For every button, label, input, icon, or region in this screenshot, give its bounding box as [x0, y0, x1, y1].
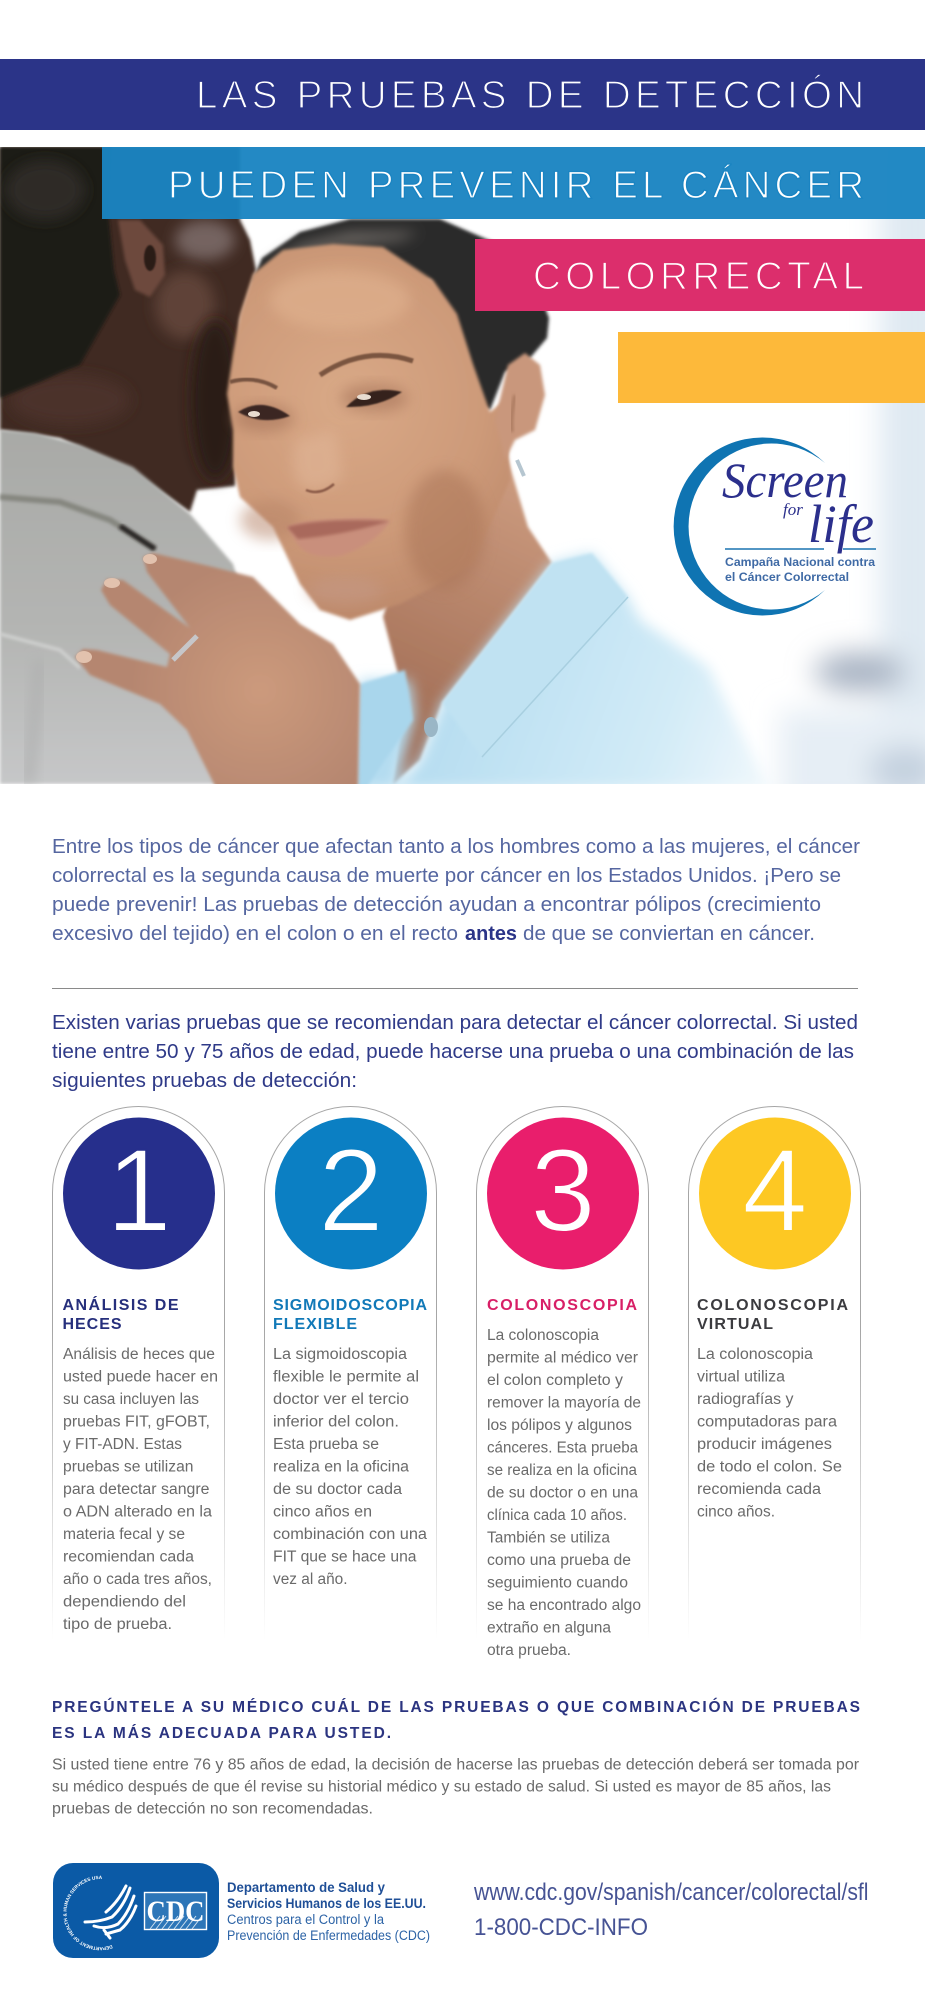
body text [273, 1346, 427, 1588]
body text: para detectar sangre [63, 1481, 210, 1498]
body text: remover la mayoría de [487, 1394, 641, 1412]
body text: cinco años en [273, 1504, 372, 1520]
body text: Análisis de heces que [63, 1346, 215, 1363]
body text: se realiza en la oficina [487, 1462, 637, 1479]
title band 1 [0, 59, 925, 130]
logo: HHS and CDC [53, 1863, 219, 1958]
title band 4: yellow [618, 332, 925, 403]
body text: y FIT-ADN. Estas [63, 1436, 182, 1453]
woman's hair [252, 219, 549, 410]
body text: dependiendo del [63, 1594, 186, 1610]
fingernails [76, 554, 157, 663]
body text: computadoras para [697, 1414, 837, 1430]
woman's face [227, 244, 510, 620]
age note paragraph [52, 1756, 859, 1818]
body text: se ha encontrado algo [487, 1597, 641, 1614]
panel: test 3 [476, 1106, 648, 1659]
man's hair [0, 147, 120, 398]
arch [476, 1106, 648, 1640]
body text: vez al año. [273, 1571, 348, 1588]
heading [62, 1295, 179, 1333]
body text: virtual utiliza [697, 1368, 785, 1386]
age note paragraph: Si usted tiene entre 76 y 85 años de edad, la decisión de hacerse las pruebas de detección deberá ser tomada por [52, 1756, 859, 1774]
agency names: Centros para el Control y la [227, 1912, 384, 1927]
body text: realiza en la oficina [273, 1458, 409, 1476]
call to action heading: ES LA MÁS ADECUADA PARA USTED. [52, 1725, 391, 1742]
heading: COLONOSCOPIA [697, 1297, 848, 1314]
agency names [227, 1880, 430, 1943]
intro paragraph 2: siguientes pruebas de detección: [52, 1069, 357, 1092]
man's ear [118, 220, 165, 297]
number circle 1 [63, 1118, 215, 1270]
woman's collar [441, 552, 628, 706]
nose [294, 436, 340, 489]
shirt collar seam [0, 497, 155, 549]
blurred window background [775, 219, 925, 784]
HHS seal text: DEPARTMENT OF HEALTH & HUMAN SERVICES USA [63, 1876, 113, 1950]
arch [688, 1106, 860, 1640]
body text: el colon completo y [487, 1372, 623, 1389]
body text: La colonoscopia [487, 1327, 599, 1344]
body text: de todo el colon. Se [697, 1458, 842, 1476]
intro paragraph: excesivo del tejido) en el colon o en el recto [52, 922, 458, 945]
body text: inferior del colon. [273, 1414, 399, 1430]
heading [273, 1297, 427, 1333]
contact information: www.cdc.gov/spanish/cancer/colorectal/sfl [473, 1879, 868, 1906]
heading: VIRTUAL [697, 1316, 773, 1333]
body text: usted puede hacer en [63, 1368, 218, 1386]
body text [487, 1327, 641, 1659]
body text: combinación con una [273, 1526, 427, 1543]
number circle 3 [487, 1118, 639, 1270]
logo: Screen for life: for [783, 500, 803, 519]
intro paragraph 2: tiene entre 50 y 75 años de edad, puede hacerse una prueba o una combinación de las [52, 1040, 854, 1063]
arch [264, 1106, 436, 1640]
number circle 4: 4 [742, 1125, 808, 1257]
body text: Esta prueba se [273, 1436, 379, 1453]
body text: recomiendan cada [63, 1548, 194, 1566]
body text: clínica cada 10 años. [487, 1507, 627, 1524]
logo tagline: Campaña Nacional contra [725, 555, 875, 569]
man's neck and head [0, 147, 256, 512]
body text: cánceres. Esta prueba [487, 1440, 638, 1456]
woman's hand [75, 553, 360, 790]
shirt button [424, 717, 438, 737]
heading: ANÁLISIS DE [62, 1295, 179, 1314]
body text: recomienda cada [697, 1481, 821, 1498]
body text: los pólipos y algunos [487, 1417, 632, 1434]
title line 2: PUEDEN PREVENIR EL CÁNCER [168, 164, 864, 207]
logo: Screen for life [674, 438, 876, 616]
body text: otra prueba. [487, 1642, 571, 1659]
intro paragraph: puede prevenir! Las pruebas de detección ayudan a encontrar pólipos (crecimiento [52, 893, 821, 916]
icon: HHS eagle [85, 1886, 136, 1938]
heading: FLEXIBLE [273, 1316, 357, 1333]
intro paragraph: de que se conviertan en cáncer. [523, 922, 815, 945]
body text: o ADN alterado en la [63, 1504, 212, 1520]
heading: COLONOSCOPIA [487, 1297, 637, 1314]
body text: año o cada tres años, [63, 1571, 212, 1588]
logo: Screen for life: el Cáncer Colorrectal [725, 570, 849, 584]
intro paragraph 2: Existen varias pruebas que se recomiendan para detectar el cáncer colorrectal. Si usted [52, 1011, 858, 1034]
intro paragraph [52, 835, 860, 945]
woman's ear [495, 353, 545, 460]
body text: La colonoscopia [697, 1346, 813, 1363]
body text: producir imágenes [697, 1436, 832, 1453]
body text: de su doctor cada [273, 1481, 402, 1498]
agency names: Servicios Humanos de los EE.UU. [227, 1896, 426, 1911]
heading: SIGMOIDOSCOPIA [273, 1297, 427, 1314]
eye sockets [234, 404, 294, 432]
number circle 3: 3 [530, 1125, 596, 1257]
number circle 2 [275, 1118, 427, 1270]
lips [300, 518, 387, 550]
number circle 1: 1 [106, 1125, 172, 1257]
intro paragraph: colorrectal es la segunda causa de muerte por cáncer en los Estados Unidos. ¡Pero se [52, 864, 841, 887]
body text: su casa incluyen las [63, 1391, 199, 1408]
body text: FIT que se hace una [273, 1548, 417, 1566]
head highlight [175, 220, 235, 260]
man's shirt [0, 428, 238, 784]
body text: permite al médico ver [487, 1350, 638, 1366]
body text: La sigmoidoscopia [273, 1346, 407, 1363]
title band 3 [475, 239, 925, 311]
call to action heading [52, 1698, 860, 1742]
CDC mark: CDC [146, 1895, 204, 1928]
body text: como una prueba de [487, 1552, 631, 1569]
body text: flexible le permite al [273, 1368, 419, 1386]
intro paragraph: antes [465, 922, 517, 945]
body text: pruebas se utilizan [63, 1458, 194, 1476]
intro paragraph 2 [52, 1011, 858, 1092]
number circle 2: 2 [318, 1125, 384, 1257]
panel: test 4 [688, 1106, 860, 1640]
heading: HECES [62, 1316, 122, 1333]
intro paragraph: Entre los tipos de cáncer que afectan tanto a los hombres como a las mujeres, el cáncer [52, 835, 860, 858]
woman's neck [383, 450, 552, 784]
heading [697, 1297, 848, 1333]
body text: seguimiento cuando [487, 1574, 628, 1592]
contact information: 1-800-CDC-INFO [474, 1914, 648, 1941]
age note paragraph: su médico después de que él revise su historial médico y su estado de salud. Si usted es mayor de 85 años, las [52, 1778, 831, 1796]
title line 3: COLORRECTAL [533, 255, 864, 298]
agency names: Prevención de Enfermedades (CDC) [227, 1928, 430, 1943]
body text: radiografías y [697, 1391, 794, 1408]
face shading [405, 470, 485, 590]
body text: extraño en alguna [487, 1620, 611, 1636]
body text: cinco años. [697, 1504, 775, 1520]
photo: couple embracing [0, 130, 925, 810]
arch [52, 1106, 224, 1640]
woman's shirt [350, 553, 770, 790]
ring [173, 636, 197, 660]
body text: materia fecal y se [63, 1526, 185, 1543]
logo: Screen for life: life [808, 494, 874, 554]
title line 1: LAS PRUEBAS DE DETECCIÓN [196, 74, 864, 117]
panel: test 2 [264, 1106, 436, 1640]
call to action heading: PREGÚNTELE A SU MÉDICO CUÁL DE LAS PRUEBAS O QUE COMBINACIÓN DE PRUEBAS [52, 1698, 860, 1716]
contact information [473, 1879, 868, 1941]
body text: tipo de prueba. [63, 1616, 172, 1633]
logo wordmark: Screen [722, 452, 848, 508]
body text: También se utiliza [487, 1530, 610, 1546]
eyebrows [230, 380, 277, 388]
eyes [238, 405, 290, 420]
age note paragraph: pruebas de detección no son recomendadas. [52, 1800, 373, 1818]
body text: doctor ver el tercio [273, 1391, 409, 1408]
body text [697, 1346, 842, 1520]
agency names: Departamento de Salud y [227, 1880, 385, 1895]
number circle 4 [699, 1118, 851, 1270]
body text: de su doctor o en una [487, 1484, 638, 1502]
title band 2 [102, 147, 925, 219]
body text [63, 1346, 218, 1633]
body text: pruebas FIT, gFOBT, [63, 1414, 210, 1430]
panel: test 1 [52, 1106, 224, 1640]
earring [517, 460, 524, 476]
